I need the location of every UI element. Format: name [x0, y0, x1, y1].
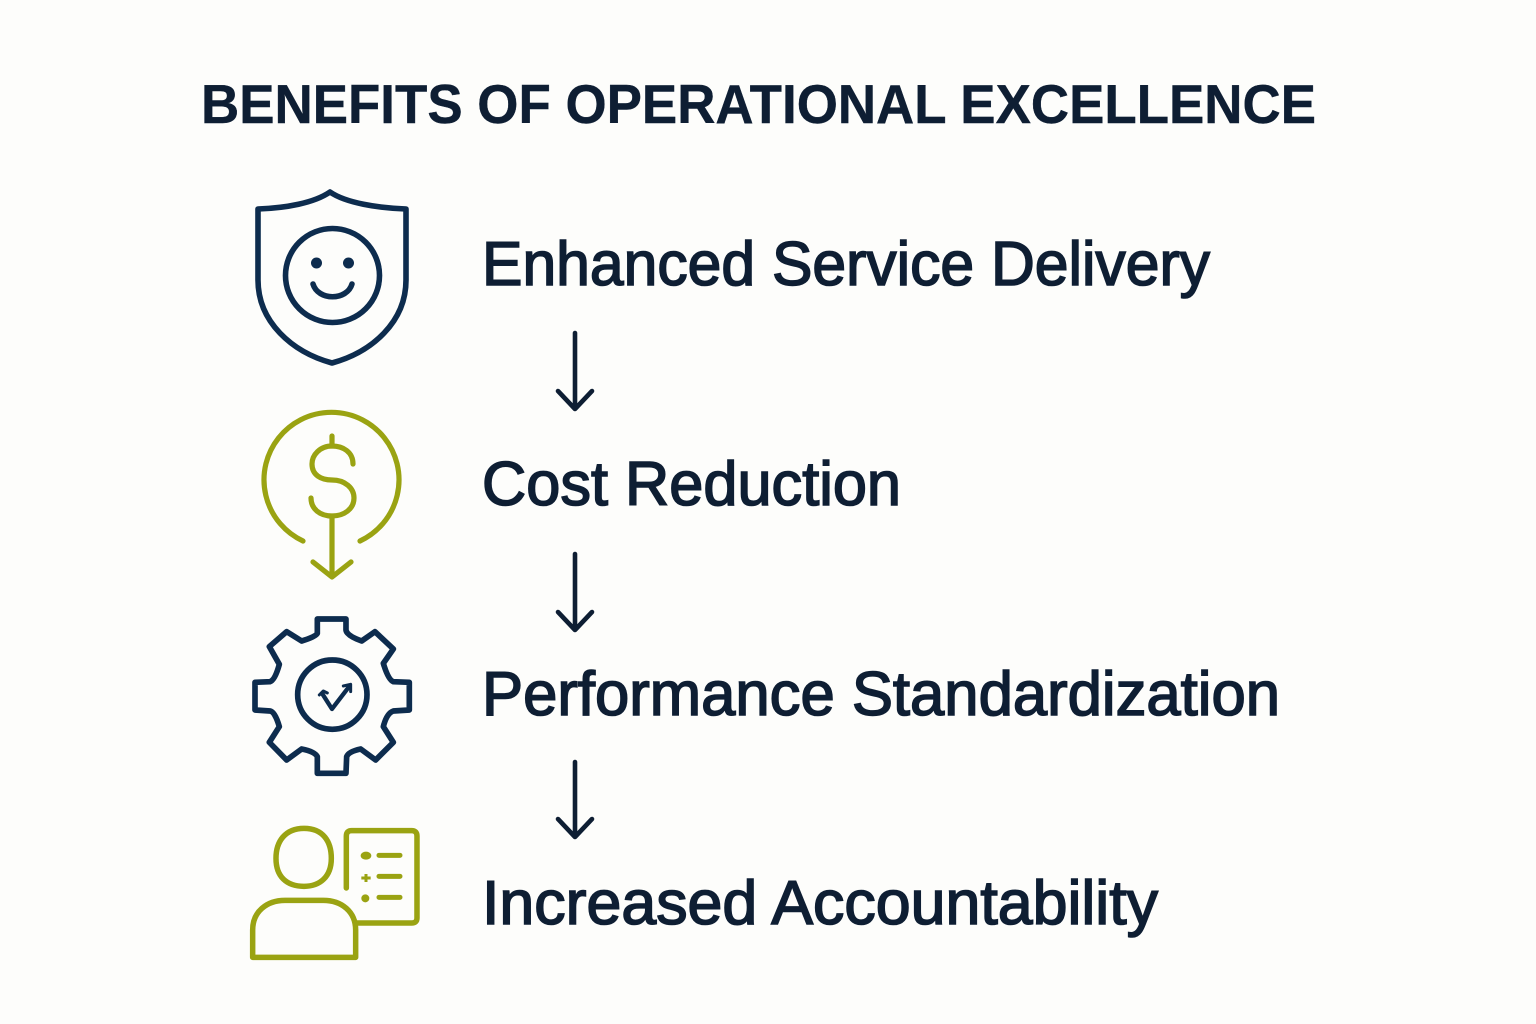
icon: person with checklist: [253, 828, 417, 957]
label: enhanced service delivery: Enhanced Service Delivery: [482, 230, 1210, 299]
label: performance standardization: Performance Standardization: [482, 660, 1280, 729]
icon: dollar with down arrow: [264, 412, 399, 577]
label: increased accountability: Increased Accountability: [482, 869, 1158, 938]
arrow 1: [558, 333, 592, 409]
icon: gear with check: [255, 619, 409, 773]
label: cost reduction: Cost Reduction: [482, 450, 901, 519]
arrow 3: [558, 762, 592, 837]
title: BENEFITS OF OPERATIONAL EXCELLENCE: [201, 73, 1316, 135]
arrow 2: [558, 554, 592, 630]
icon: shield with smiley: [258, 192, 406, 363]
